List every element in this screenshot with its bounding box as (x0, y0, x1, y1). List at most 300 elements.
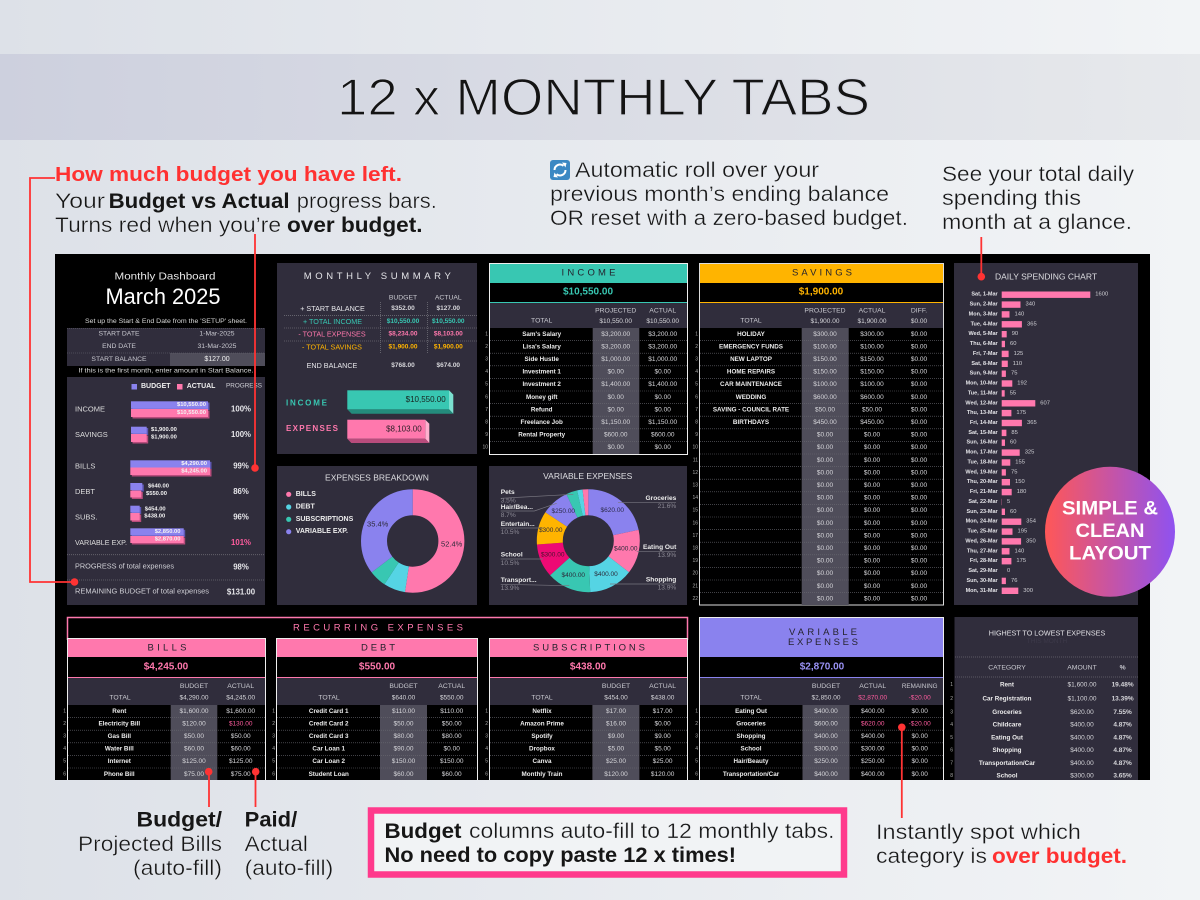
panel: income table: $10,550.00 (646, 318, 679, 325)
savings rows: $0.00 (817, 583, 834, 590)
panel: subscriptions table: $438.00 (651, 694, 675, 702)
daily labels: Mon, 3-Mar (969, 311, 999, 317)
ranking rows: 4.87% (1113, 760, 1132, 767)
callout box: auto-fill note (371, 810, 844, 874)
daily labels: Sun, 9-Mar (970, 371, 999, 377)
bars: income: $10,550.00 (177, 410, 206, 416)
ranking rows: 13.39% (1112, 696, 1134, 702)
daily values: 150 (1015, 479, 1025, 485)
variable rows: $0.00 (912, 733, 928, 740)
summary row: total expenses: $8,234.00 (389, 330, 418, 338)
variable row numbers: 3 (695, 734, 698, 740)
daily labels: Thu, 6-Mar (970, 341, 999, 347)
ranking rows: Groceries (992, 709, 1022, 716)
income rows: $1,400.00 (601, 381, 631, 388)
subscriptions rows: $5.00 (608, 746, 625, 753)
debt rows: Credit Card 1 (309, 708, 349, 715)
income rows: $1,400.00 (648, 381, 678, 388)
savings row numbers: 19 (692, 558, 698, 564)
variable rows: $300.00 (814, 746, 838, 753)
callout: daily spending: spending this (942, 187, 1081, 210)
income rows: Side Hustle (525, 356, 559, 363)
debt rows: $110.00 (440, 708, 464, 715)
ranking rows: Shopping (992, 747, 1022, 754)
callout: paid actual: Paid/ (245, 808, 297, 832)
variable rows: -$20.00 (909, 720, 931, 727)
summary row: total expenses (298, 330, 463, 338)
panel: daily spending chart (954, 263, 1138, 605)
summary row: end balance: END BALANCE (307, 361, 358, 370)
savings rows: $0.00 (817, 545, 834, 552)
debt rows: $80.00 (442, 733, 462, 740)
subscriptions rows: Canva (533, 758, 552, 765)
bills rows: $60.00 (231, 746, 251, 753)
savings rows: $0.00 (911, 331, 928, 338)
panel: expenses breakdown: EXPENSES BREAKDOWN (325, 472, 429, 482)
subscriptions rows: Dropbox (529, 746, 555, 753)
income rows: Rental Property (518, 432, 566, 439)
subscriptions row numbers: 4 (485, 746, 488, 752)
debt row numbers: 5 (272, 759, 275, 765)
daily values: 5 (1007, 499, 1010, 505)
variable rows: $400.00 (814, 733, 838, 740)
savings rows: $0.00 (817, 495, 834, 502)
savings rows: $150.00 (860, 369, 884, 376)
remaining budget (75, 588, 256, 596)
panel: bills table: ACTUAL (227, 683, 254, 690)
savings row numbers: 14 (692, 495, 698, 501)
slice labels right: 13.9% (658, 552, 676, 559)
ranking row numbers (950, 682, 953, 779)
savings rows: $0.00 (864, 495, 881, 502)
callout: budget left and progress bars: progress bars. (297, 190, 437, 213)
callout box: auto-fill note: No need to copy paste 12 x times! (384, 844, 736, 867)
date table: END DATE (102, 343, 136, 350)
ranking row numbers: 1 (950, 682, 953, 688)
slice labels left: Transport... (501, 577, 537, 584)
subscriptions row numbers: 5 (485, 759, 488, 765)
callout: budget left and progress bars: Your (55, 190, 105, 213)
panel: monthly summary: BUDGET (389, 294, 417, 302)
income row numbers: 6 (485, 394, 488, 400)
variable rows: $400.00 (814, 708, 838, 715)
panel: subscriptions table: BUDGET (602, 683, 630, 690)
panel: variable expenses table: ACTUAL (859, 683, 886, 690)
dashboard black background (55, 254, 1150, 780)
income rows: $3,200.00 (648, 331, 678, 338)
variable rows: $400.00 (861, 708, 885, 715)
savings rows: $0.00 (911, 570, 928, 577)
variable row numbers: 4 (695, 746, 698, 752)
subscriptions rows: Spotify (531, 733, 553, 740)
icon: roll over arrows (550, 160, 570, 180)
expenses bar (286, 420, 429, 443)
callout: daily spending (942, 163, 1135, 234)
daily values: 90 (1012, 331, 1018, 337)
savings rows: $0.00 (911, 482, 928, 489)
daily labels: Sun, 16-Mar (967, 440, 999, 446)
panel: subscriptions table: ACTUAL (649, 683, 676, 690)
savings row numbers: 17 (692, 533, 698, 539)
daily labels: Sun, 30-Mar (967, 578, 999, 584)
panel: income table: TOTAL (531, 318, 553, 324)
ranking rows: 4.87% (1113, 747, 1132, 754)
daily labels: Fri, 21-Mar (970, 489, 999, 495)
badge: simple and clean layout: SIMPLE & (1062, 498, 1158, 520)
panel: variable expenses table (695, 618, 944, 788)
savings rows: $0.00 (817, 469, 834, 476)
arrow: budget column callout (205, 768, 212, 807)
savings row numbers: 13 (692, 482, 698, 488)
summary row: total savings: - TOTAL SAVINGS (302, 342, 362, 352)
daily bars (1002, 292, 1090, 594)
date table: $127.00 (204, 356, 230, 363)
daily labels: Thu, 27-Mar (967, 548, 999, 554)
savings rows: $0.00 (864, 520, 881, 527)
bars: savings: $1,900.00 (151, 427, 177, 433)
income row numbers: 9 (485, 432, 488, 438)
daily values: 175 (1016, 558, 1026, 564)
panel: bills table: BILLS (148, 642, 186, 654)
savings rows: $0.00 (911, 432, 928, 439)
bars: debt: $640.00 (148, 484, 169, 490)
savings rows: $0.00 (864, 558, 881, 565)
legend (286, 491, 354, 535)
savings rows: $0.00 (817, 482, 834, 489)
daily values: 365 (1027, 321, 1037, 327)
variable rows (723, 708, 931, 778)
panel: subscriptions table: $438.00 (570, 662, 607, 672)
income bar (286, 390, 453, 414)
daily labels: Wed, 5-Mar (968, 331, 999, 337)
bills rows: Water Bill (105, 746, 134, 753)
subscriptions rows: $17.00 (606, 708, 626, 715)
savings row numbers: 15 (692, 508, 698, 514)
savings rows: $0.00 (911, 394, 928, 401)
savings rows: $0.00 (864, 482, 881, 489)
panel: variable expenses table: TOTAL (740, 694, 762, 702)
slice labels right: 21.6% (658, 503, 676, 510)
panel: daily spending chart: DAILY SPENDING CHART (995, 272, 1097, 282)
ranking rows: $300.00 (1070, 772, 1094, 780)
daily values: 110 (1013, 361, 1022, 367)
daily labels: Mon, 17-Mar (966, 450, 999, 456)
bars: variable expenses: 101% (231, 538, 251, 547)
panel: variable expenses chart (489, 466, 687, 605)
daily labels: Mon, 31-Mar (966, 588, 999, 594)
legend: PROGRESS (226, 382, 262, 390)
ranking rows: $1,600.00 (1068, 682, 1097, 688)
daily values: 76 (1011, 578, 1017, 584)
arrow: paid column callout (252, 768, 260, 807)
daily values: 325 (1025, 450, 1034, 456)
daily labels: Fri, 28-Mar (970, 558, 999, 564)
donut chart (374, 502, 451, 580)
callout: automatic roll over: Automatic roll over your (575, 159, 819, 182)
debt rows: $50.00 (394, 720, 414, 727)
savings row numbers: 7 (695, 407, 698, 413)
callout: budget left and progress bars: Budget vs Actual (109, 190, 290, 213)
debt rows: Student Loan (309, 771, 349, 778)
daily values: 155 (1015, 460, 1025, 466)
ranking rows: $400.00 (1070, 760, 1094, 767)
daily labels: Thu, 20-Mar (967, 479, 999, 485)
subscriptions rows: $0.00 (654, 720, 671, 727)
income bar: INCOME (286, 398, 328, 408)
savings rows: $0.00 (911, 356, 928, 363)
daily values: 1600 (1095, 292, 1108, 298)
income rows (518, 331, 678, 451)
summary row: start balance: $127.00 (437, 305, 460, 312)
income rows: $3,200.00 (601, 331, 631, 338)
savings row numbers: 10 (692, 445, 698, 451)
debt rows: $0.00 (444, 746, 460, 753)
bars: subscriptions: 96% (233, 512, 249, 522)
bills rows: Phone Bill (104, 771, 135, 778)
savings rows: $150.00 (860, 356, 884, 363)
bars: bills: BILLS (75, 462, 95, 470)
callout: budget projected bills: Budget/ (136, 808, 222, 832)
daily values: 140 (1014, 311, 1024, 317)
panel: bills table: $4,290.00 (180, 694, 209, 702)
panel: expenses breakdown (277, 466, 477, 605)
income rows: $1,000.00 (601, 356, 631, 363)
panel: variable expenses table: BUDGET (812, 683, 840, 690)
panel: variable expenses table: $2,870.00 (858, 694, 888, 702)
bills rows: $120.00 (182, 720, 206, 727)
legend (132, 382, 262, 390)
daily labels: Tue, 25-Mar (968, 529, 999, 535)
variable rows: School (740, 746, 762, 753)
slice labels left: Entertain... (501, 521, 535, 528)
ranking row numbers: 4 (950, 722, 953, 728)
panel: subscriptions table: SUBSCRIPTIONS (533, 642, 645, 654)
callout: budget left and progress bars: How much budget you have left. (55, 164, 402, 186)
savings row numbers: 9 (695, 432, 698, 438)
variable rows: $600.00 (814, 720, 838, 727)
callout: budget projected bills: (auto-fill) (133, 857, 222, 880)
savings rows: $0.00 (817, 570, 834, 577)
savings rows: $0.00 (911, 532, 928, 539)
subscriptions rows: $120.00 (604, 771, 628, 778)
panel: variable expenses table: -$20.00 (909, 694, 931, 702)
callout: daily spending: See your total daily (942, 163, 1135, 186)
slice values: $400.00 (594, 571, 618, 578)
panel: highest to lowest expenses: HIGHEST TO LOWEST EXPENSES (989, 628, 1105, 638)
savings rows: $0.00 (817, 507, 834, 514)
variable row numbers: 1 (695, 708, 698, 714)
panel: debt table: $550.00 (440, 694, 464, 702)
bills row numbers: 5 (63, 759, 66, 765)
daily labels: Sun, 23-Mar (967, 509, 999, 515)
slice labels left: Hair/Bea... (501, 504, 533, 511)
savings rows: $0.00 (864, 532, 881, 539)
bars: income (75, 401, 251, 418)
variable rows: $0.00 (912, 771, 928, 778)
savings row numbers: 8 (695, 420, 698, 426)
savings rows: $0.00 (911, 558, 928, 565)
callout: automatic roll over: previous month’s ending balance (550, 183, 889, 206)
daily values: 300 (1023, 588, 1033, 594)
slice values: $300.00 (541, 552, 565, 558)
panel: monthly dashboard (67, 271, 265, 605)
slice values: $400.00 (614, 546, 638, 552)
slice labels left: 10.5% (501, 529, 520, 536)
progress of total expenses: PROGRESS of total expenses (75, 564, 175, 570)
savings rows: $0.00 (911, 406, 928, 413)
daily labels: Wed, 19-Mar (965, 469, 999, 475)
savings rows: $150.00 (813, 356, 837, 363)
daily values: 195 (1018, 529, 1027, 535)
savings rows: $0.00 (817, 558, 834, 565)
bars: variable expenses: $2,850.00 (155, 529, 180, 535)
slice values: $620.00 (601, 507, 624, 514)
income row numbers: 7 (485, 407, 488, 413)
daily values: 340 (1026, 302, 1035, 308)
panel: savings table: $1,900.00 (811, 318, 840, 325)
daily labels: Mon, 24-Mar (966, 519, 999, 525)
ranking rows: Rent (1000, 682, 1015, 688)
debt rows (309, 708, 464, 778)
savings rows: $0.00 (864, 457, 881, 464)
savings rows: $0.00 (817, 595, 834, 602)
slice labels right: Groceries (646, 495, 677, 502)
bars: variable expenses: $2,870.00 (155, 536, 180, 542)
variable row numbers (695, 708, 698, 777)
legend: BUDGET (141, 383, 171, 390)
subscriptions rows: Monthly Train (522, 771, 563, 778)
slice values: $250.00 (552, 508, 575, 515)
variable rows: $400.00 (861, 733, 885, 740)
bars: savings: $1,900.00 (151, 435, 177, 441)
bars: income: $10,550.00 (177, 402, 206, 408)
bills rows (98, 708, 256, 778)
panel: subscriptions table (485, 638, 688, 788)
bars: subscriptions (75, 506, 249, 522)
callout: automatic roll over: OR reset with a zero-based budget. (550, 207, 908, 230)
income rows: $0.00 (655, 444, 671, 451)
savings rows: $0.00 (911, 343, 928, 350)
savings rows: $0.00 (911, 520, 928, 527)
subscriptions rows: $5.00 (654, 746, 671, 753)
panel: expenses breakdown: 52.4% (441, 540, 463, 548)
callout: over budget: Instantly spot which (876, 821, 1081, 844)
debt rows: $90.00 (394, 746, 414, 753)
variable rows: Groceries (736, 720, 766, 727)
date table: 31-Mar-2025 (198, 343, 237, 350)
ranking rows: Transportation/Car (979, 760, 1036, 767)
ranking rows: Car Registration (982, 696, 1032, 702)
daily labels: Sat, 1-Mar (971, 292, 999, 298)
ranking rows: 4.87% (1113, 734, 1132, 742)
ranking rows: $400.00 (1070, 734, 1094, 742)
income rows: Lisa's Salary (523, 343, 561, 350)
panel: monthly summary: ACTUAL (435, 294, 462, 302)
income row numbers: 10 (482, 445, 488, 451)
savings rows: CAR MAINTENANCE (720, 381, 782, 388)
savings rows: $100.00 (860, 381, 884, 388)
savings rows: $0.00 (911, 583, 928, 590)
callout: paid actual (244, 808, 333, 880)
savings rows: $0.00 (864, 595, 881, 602)
bills rows: Internet (108, 758, 132, 765)
summary row: end balance: $674.00 (437, 362, 460, 369)
savings rows: $0.00 (911, 369, 928, 376)
ranking rows: 3.65% (1113, 772, 1132, 780)
panel: income table (482, 264, 688, 454)
daily values: 125 (1014, 351, 1023, 357)
savings rows: HOLIDAY (737, 331, 766, 338)
daily labels: Fri, 7-Mar (973, 351, 999, 357)
savings row numbers (692, 331, 698, 602)
subscriptions rows: Amazon Prime (520, 720, 564, 727)
bills rows: $50.00 (231, 733, 251, 740)
ranking rows: Childcare (993, 722, 1022, 728)
ranking rows: Eating Out (991, 734, 1024, 742)
savings rows: $0.00 (911, 469, 928, 476)
daily labels: Sat, 22-Mar (968, 499, 999, 505)
slice labels right: Eating Out (643, 544, 677, 551)
savings row numbers: 16 (692, 520, 698, 526)
income rows: Investment 2 (522, 381, 561, 388)
income rows: $0.00 (655, 369, 671, 376)
panel: debt table (272, 638, 478, 788)
bills row numbers: 1 (63, 708, 66, 714)
savings row numbers: 4 (695, 369, 698, 375)
ranking row numbers: 6 (950, 748, 953, 754)
bills rows: $1,600.00 (226, 708, 256, 715)
savings row numbers: 1 (695, 331, 698, 337)
panel: savings table: $1,900.00 (858, 318, 887, 325)
callout box: auto-fill note: Budget (384, 820, 462, 843)
savings row numbers: 6 (695, 394, 698, 400)
savings rows: $600.00 (813, 394, 837, 401)
income rows: Refund (531, 406, 553, 413)
daily values: 180 (1017, 489, 1026, 495)
bars: debt: 86% (233, 487, 249, 496)
income rows: $0.00 (608, 369, 624, 376)
legend: ACTUAL (187, 383, 216, 390)
ranking rows: 4.87% (1113, 722, 1132, 728)
summary row: total savings (302, 342, 463, 352)
income rows: $1,000.00 (648, 356, 678, 363)
variable rows: $620.00 (861, 720, 885, 727)
summary row: total income: + TOTAL INCOME (303, 317, 362, 326)
panel: monthly summary (277, 263, 477, 454)
income rows: $0.00 (608, 406, 624, 413)
panel: savings table: DIFF. (911, 308, 927, 314)
debt row numbers (272, 708, 275, 777)
summary row: end balance: $768.00 (391, 362, 415, 369)
dashboard heading: Set up the Start & End Date from the 'SETUP' sheet. (85, 318, 247, 325)
bars: savings: 100% (231, 430, 251, 439)
savings rows: WEDDING (736, 394, 766, 401)
daily values: 192 (1017, 380, 1027, 386)
income bar: $10,550.00 (406, 395, 446, 404)
savings rows: HOME REPAIRS (727, 369, 775, 376)
daily values: 350 (1026, 538, 1036, 544)
debt rows: $150.00 (440, 758, 464, 765)
summary row: total income: $10,550.00 (432, 318, 465, 325)
callout: over budget: category is (876, 845, 987, 868)
subscriptions rows: $25.00 (653, 758, 673, 765)
income rows: Sam's Salary (522, 331, 562, 338)
ranking row numbers: 7 (950, 760, 953, 766)
savings rows: $600.00 (860, 394, 884, 401)
bars: subscriptions: $454.00 (145, 506, 166, 512)
income rows: $0.00 (655, 406, 671, 413)
panel: debt table: DEBT (361, 642, 395, 654)
